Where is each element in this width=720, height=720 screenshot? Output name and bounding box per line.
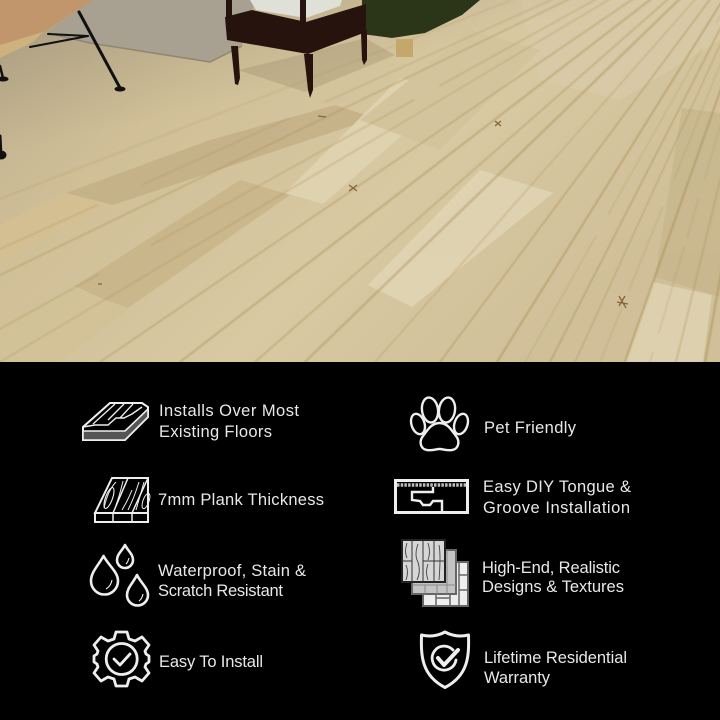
swatch: fine grain [412,550,456,594]
swatch: brick planks [423,562,468,606]
text: easy diy tongue and groove installation: Easy DIY Tongue & [483,478,631,496]
sofa [362,0,480,38]
wood knots [98,116,628,308]
icon: gear with check [94,632,149,686]
chair seat [0,0,93,45]
text: 7mm plank thickness: 7mm Plank Thickness [158,491,324,509]
chair frame [0,12,125,159]
feature: easy to install [94,632,263,686]
rug edge [48,33,242,62]
text: waterproof, stain and scratch resistant [158,562,306,600]
books [250,0,342,18]
text: installs over most existing floors [159,402,299,441]
table shadow [238,38,395,92]
text: high-end realistic designs and textures [482,559,624,596]
icon: wood planks [95,478,152,522]
text: lifetime residential warranty: Lifetime Residential [484,649,627,667]
icon: stacked texture swatches [402,540,468,606]
feature: waterproof [91,545,306,606]
feature: plank thickness [95,478,324,522]
wood grain streaks [0,0,720,362]
text: high-end realistic designs and textures: Designs & Textures [482,578,624,596]
text: easy to install: Easy To Install [159,653,263,671]
text: lifetime residential warranty [484,649,627,687]
text: waterproof, stain and scratch resistant: Scratch Resistant [158,582,283,600]
icon: tongue and groove profile [396,480,468,513]
feature: installs over most existing floors [83,402,299,441]
swatch: wood grain [402,540,445,582]
text: lifetime residential warranty: Warranty [484,669,551,687]
feature: tongue and groove [396,478,631,517]
text: high-end realistic designs and textures: High-End, Realistic [482,559,620,577]
sofa foot [396,39,413,57]
left shading [0,0,362,108]
icon: shield with check [421,632,469,688]
floor planks [67,78,720,362]
feature: lifetime warranty [421,632,627,688]
rug [48,0,255,62]
side table [225,0,367,98]
text: easy diy tongue and groove installation: Groove Installation [483,499,630,517]
icon: water drops [91,545,148,606]
text: easy diy tongue and groove installation [483,478,631,517]
text: waterproof, stain and scratch resistant: Waterproof, Stain & [158,562,306,580]
icon: layered floor block [83,403,148,440]
text: pet friendly: Pet Friendly [484,419,577,437]
chair cushion edge [0,32,43,58]
feature: pet friendly [409,397,577,450]
feature: high-end designs [402,540,624,606]
text: installs over most existing floors: Existing Floors [159,423,272,441]
icon: paw print [409,397,470,450]
photo: wood floor room scene [0,0,720,362]
floor base [0,0,720,362]
text: installs over most existing floors: Installs Over Most [159,402,299,420]
